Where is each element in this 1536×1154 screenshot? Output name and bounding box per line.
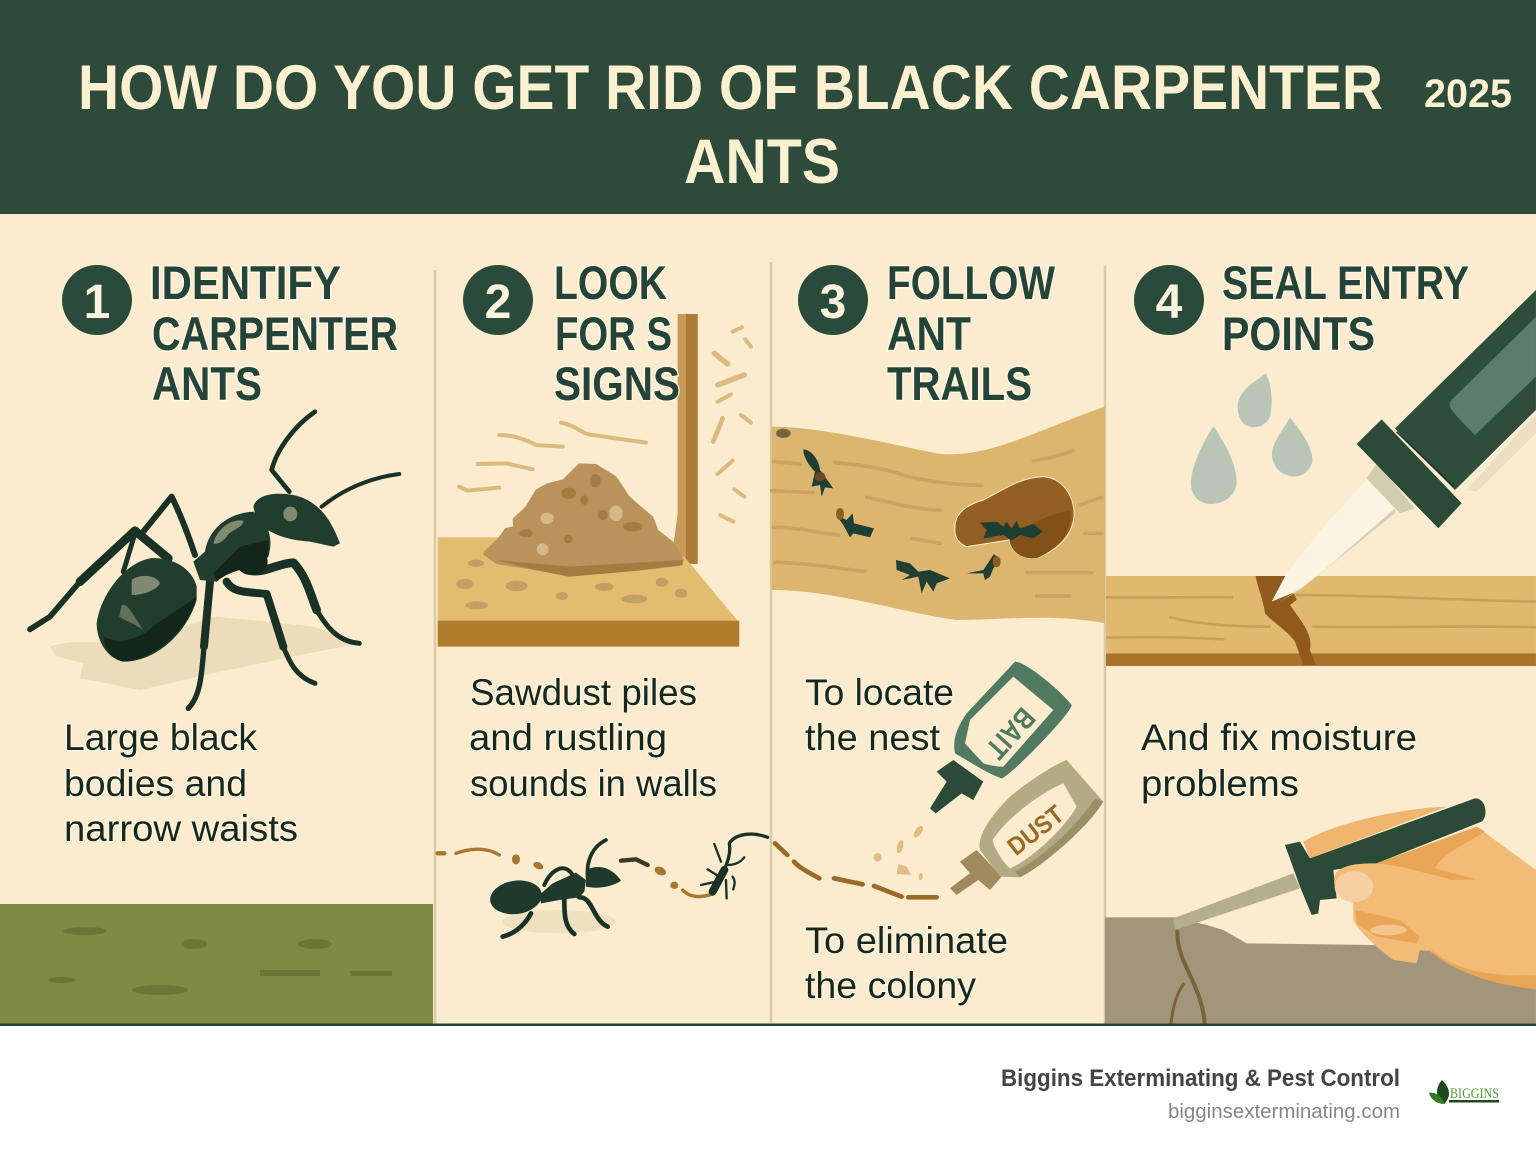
text: description: problems <box>1141 763 1299 804</box>
illustration: ant and trail <box>438 834 768 937</box>
heading: seal entry points: POINTS <box>1222 307 1375 360</box>
heading: follow ant trails <box>887 256 1056 410</box>
step number 4: 4 <box>1156 276 1183 329</box>
footer brand text: bigginsexterminating.com <box>1168 1101 1400 1123</box>
heading: follow ant trails: TRAILS <box>887 357 1032 410</box>
step number 1: 1 <box>84 276 110 329</box>
heading: follow ant trails: FOLLOW <box>887 256 1056 309</box>
text: eliminate the colony <box>805 920 1008 1006</box>
heading: look for signs: LOOK <box>554 256 667 309</box>
title: ANTS <box>684 127 840 197</box>
header banner <box>0 0 1536 214</box>
panel: step 3 follow ant trails <box>772 256 1105 1006</box>
heading: seal entry points: SEAL ENTRY <box>1222 256 1469 309</box>
footer brand text: Biggins Exterminating & Pest Control <box>1001 1065 1400 1092</box>
panel: step 4 seal entry points <box>1105 256 1536 1024</box>
text: locate the nest: To locate <box>805 672 954 713</box>
logo: Biggins leaf: BIGGINS <box>1450 1086 1499 1102</box>
text: locate the nest: the nest <box>805 717 941 758</box>
heading: look for signs: SIGNS <box>554 357 680 410</box>
step number 3: 3 <box>820 276 846 329</box>
step number 3 <box>798 265 868 335</box>
heading: follow ant trails: ANT <box>887 307 971 360</box>
text: description: and rustling <box>469 717 667 758</box>
step number 2 <box>463 265 533 335</box>
text: description <box>469 672 717 804</box>
illustration: wood with ants and nest <box>772 407 1105 623</box>
title <box>78 53 1383 197</box>
grass strip <box>0 904 433 1024</box>
illustration: hand with caulking tool on wall <box>1105 798 1536 1024</box>
text: description: Large black <box>64 717 257 758</box>
text: description: bodies and <box>64 763 247 804</box>
heading: look for signs: FOR S <box>555 307 672 360</box>
title: HOW DO YOU GET RID OF BLACK CARPENTER <box>78 53 1383 123</box>
illustration: large black ant <box>30 412 399 708</box>
text: locate the nest <box>805 672 954 758</box>
panel: step 2 look for signs <box>438 256 768 937</box>
heading: identify carpenter ants: IDENTIFY <box>150 256 341 309</box>
footer brand text <box>1001 1065 1400 1123</box>
text: description <box>64 717 298 849</box>
text: eliminate the colony: To eliminate <box>805 920 1008 961</box>
heading: identify carpenter ants: CARPENTER <box>152 307 398 360</box>
illustration: caulk gun sealing cracked wood <box>1106 290 1536 666</box>
step number 4 <box>1134 265 1204 335</box>
heading: look for signs <box>554 256 680 410</box>
illustration: sawdust pile on wood <box>438 314 751 647</box>
text: description: And fix moisture <box>1141 717 1417 758</box>
text: description: Sawdust piles <box>470 672 697 713</box>
logo: Biggins leaf <box>1429 1080 1499 1104</box>
text: description: sounds in walls <box>470 763 717 804</box>
illustration: bait and dust bottles <box>775 662 1103 897</box>
illustration: bait and dust bottles: BAIT <box>979 701 1042 765</box>
panel: step 1 identify carpenter ants <box>0 256 433 1024</box>
illustration: bait and dust bottles: DUST <box>1002 800 1070 861</box>
text: description <box>1141 717 1417 804</box>
step number 2: 2 <box>485 276 511 329</box>
step number 1 <box>62 265 132 335</box>
heading: identify carpenter ants: ANTS <box>152 357 262 410</box>
heading: seal entry points <box>1222 256 1469 360</box>
year: 2025 <box>1424 72 1512 116</box>
text: eliminate the colony: the colony <box>805 965 977 1006</box>
text: description: narrow waists <box>64 808 298 849</box>
heading: identify carpenter ants <box>150 256 398 410</box>
